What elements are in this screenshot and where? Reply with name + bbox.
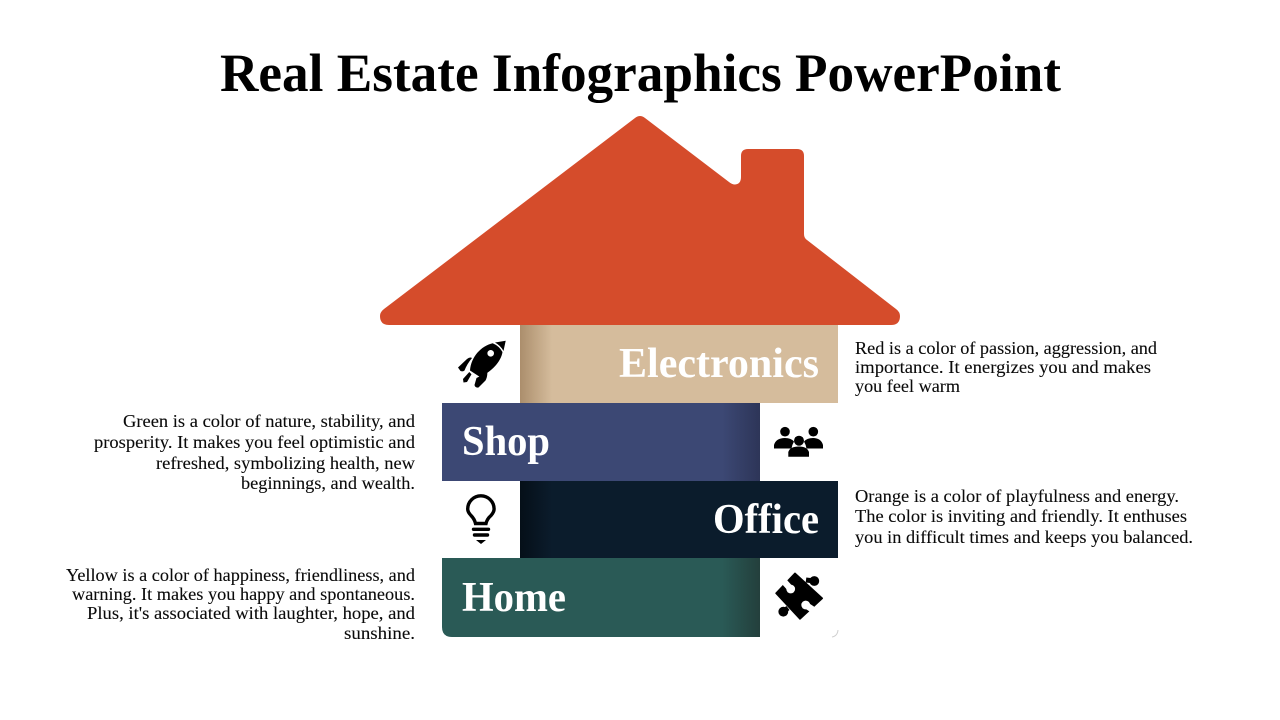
- text block: orange: Orange is a color of playfulness and energy.: [855, 486, 1179, 506]
- text block: green: beginnings, and wealth.: [241, 473, 415, 493]
- band: Office: Office: [713, 497, 819, 543]
- text block: orange: The color is inviting and friendly. It enthuses: [855, 506, 1187, 526]
- band: Electronics: Electronics: [619, 341, 819, 387]
- text block: green: prosperity. It makes you feel optimistic and: [94, 432, 415, 452]
- text block: yellow: sunshine.: [344, 623, 415, 643]
- band: Office: [520, 481, 838, 558]
- band: Shop: [442, 403, 760, 481]
- band: Home: [442, 558, 760, 637]
- text block: yellow: Plus, it's associated with laughter, hope, and: [87, 603, 415, 623]
- text block: orange: you in difficult times and keeps you balanced.: [855, 527, 1193, 547]
- band: Electronics: [520, 325, 838, 403]
- text block: red: importance. It energizes you and makes: [855, 357, 1151, 377]
- icon: rocket: [458, 341, 506, 388]
- icon: puzzle piece: [776, 573, 822, 619]
- text block: red: Red is a color of passion, aggression, and: [855, 338, 1157, 358]
- text block: red: [855, 338, 1157, 396]
- text block: green: Green is a color of nature, stability, and: [123, 411, 415, 431]
- text block: yellow: Yellow is a color of happiness, friendliness, and: [66, 565, 415, 585]
- title: Real Estate Infographics PowerPoint: [220, 43, 1061, 103]
- text block: red: you feel warm: [855, 376, 960, 396]
- band: Home: Home: [462, 575, 566, 621]
- band: Shop: Shop: [462, 419, 550, 465]
- corner mark: [832, 630, 838, 637]
- text block: green: refreshed, symbolizing health, new: [156, 453, 415, 473]
- icon: people: [774, 427, 823, 457]
- text block: green: [94, 411, 415, 493]
- text block: yellow: [66, 565, 415, 643]
- house roof: [380, 116, 900, 325]
- text block: orange: [855, 486, 1193, 547]
- icon: light bulb: [468, 496, 494, 544]
- text block: yellow: warning. It makes you happy and spontaneous.: [72, 584, 415, 604]
